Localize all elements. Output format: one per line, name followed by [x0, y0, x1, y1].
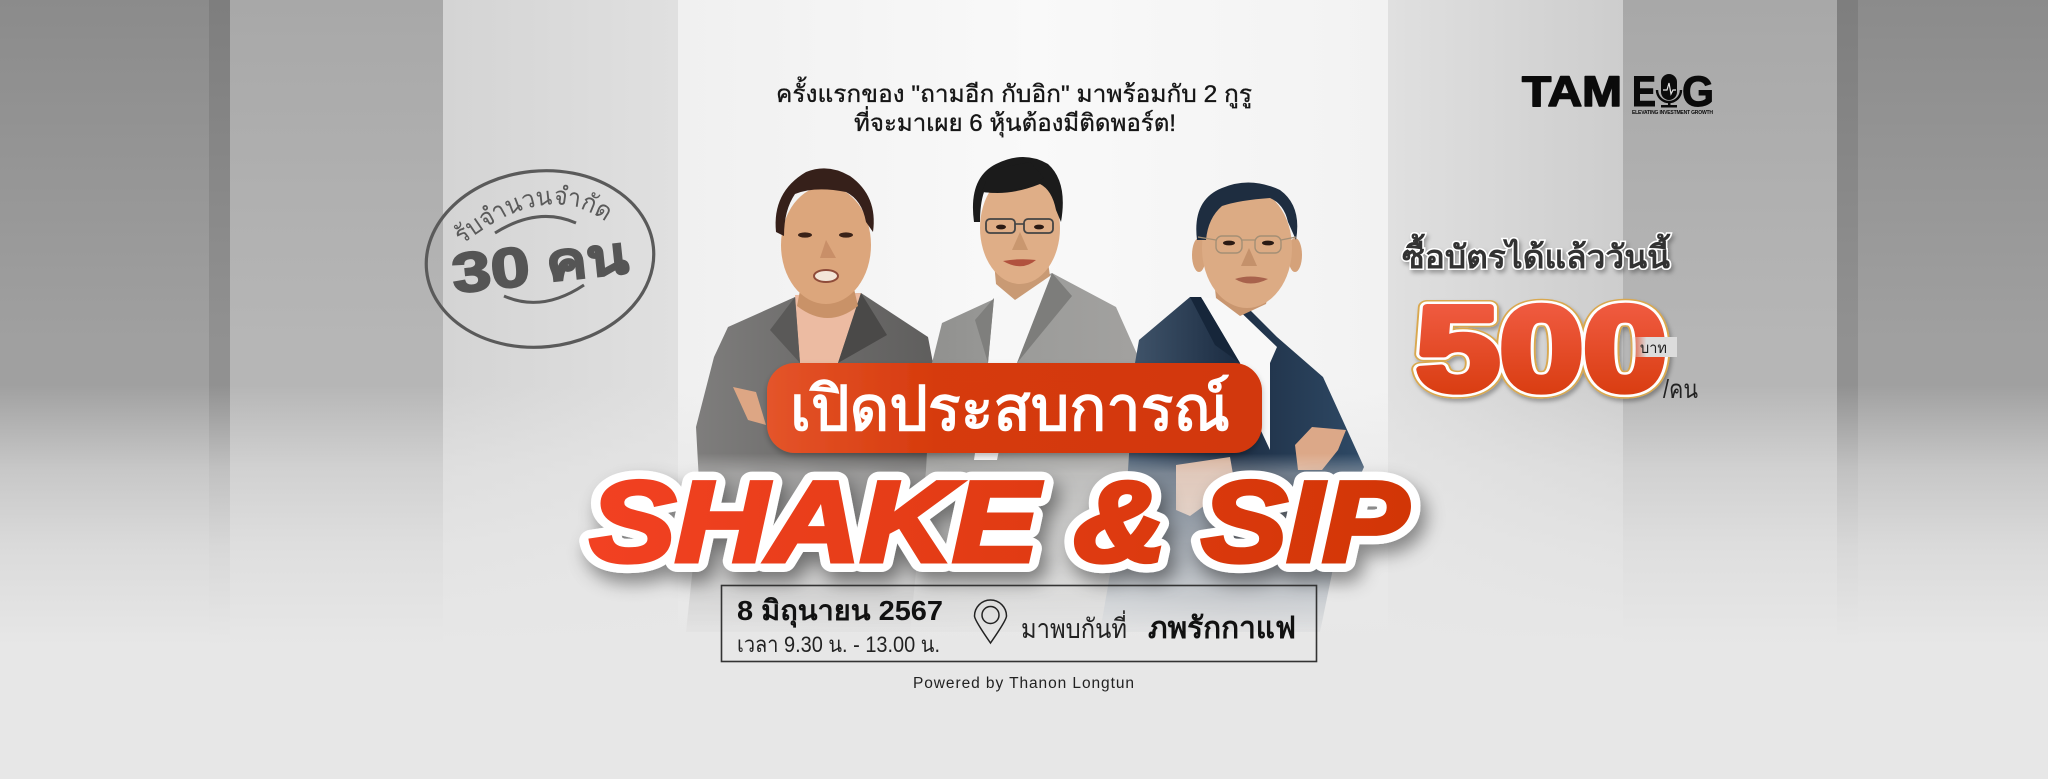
heading: intro text: ที่จะมาเผย 6 หุ้นต้องมีติดพอร์ต!	[854, 106, 1176, 138]
logo: TAM EIG: G	[1682, 68, 1714, 116]
logo: TAM EIG	[1522, 68, 1714, 116]
price: buy tickets today	[1402, 233, 1698, 416]
price value: 500 baht per person: บาท	[1640, 340, 1667, 357]
banner: experience heading: เปิดประสบการณ์	[790, 375, 1230, 444]
price value: 500 baht per person: 500	[1416, 282, 1667, 416]
speakers: three portraits	[686, 157, 1364, 632]
price value: 500 baht per person: 500	[1416, 282, 1667, 416]
info box: date, time and place	[722, 586, 1316, 662]
person: left speaker	[686, 168, 936, 632]
person: right speaker	[1100, 182, 1364, 632]
logo: TAM EIG: TAM	[1522, 68, 1622, 116]
price value: 500 baht per person: /คน	[1663, 374, 1698, 404]
stamp: limited to 30 people: 30	[449, 234, 533, 305]
logo: TAM EIG: E	[1632, 68, 1656, 116]
price: buy tickets today: ซื้อบัตรได้แล้ววันนี้	[1402, 233, 1671, 275]
stamp: limited to 30 people: รับจำนวนจำกัด	[454, 184, 610, 241]
icon: location pin	[974, 600, 1006, 643]
info box: date, time and place: ภพรักกาแฟ	[1148, 612, 1296, 645]
banner: experience heading	[767, 363, 1262, 453]
info box: date, time and place: เวลา 9.30 น. - 13.00 น.	[737, 632, 940, 657]
title: SHAKE & SIP: SHAKE & SIP	[590, 459, 1409, 586]
stamp: limited to 30 people: คน	[543, 227, 631, 293]
person: middle speaker	[914, 157, 1137, 616]
heading: intro text	[776, 76, 1252, 138]
info box: date, time and place: มาพบกันที่	[1021, 610, 1127, 644]
info box: date, time and place: 8 มิถุนายน 2567	[737, 595, 943, 628]
title: SHAKE & SIP: SHAKE & SIP	[590, 459, 1409, 586]
stamp: limited to 30 people	[424, 169, 656, 349]
icon: microphone	[1657, 74, 1681, 108]
price value: 500 baht per person: 500	[1416, 282, 1667, 416]
logo: TAM EIG: ELEVATING INVESTMENT GROWTH	[1632, 110, 1713, 116]
heading: intro text: ครั้งแรกของ "ถามอีก กับอิก" มาพร้อมกับ 2 กูรู	[776, 76, 1252, 109]
credit: powered by: Powered by Thanon Longtun	[913, 675, 1134, 692]
